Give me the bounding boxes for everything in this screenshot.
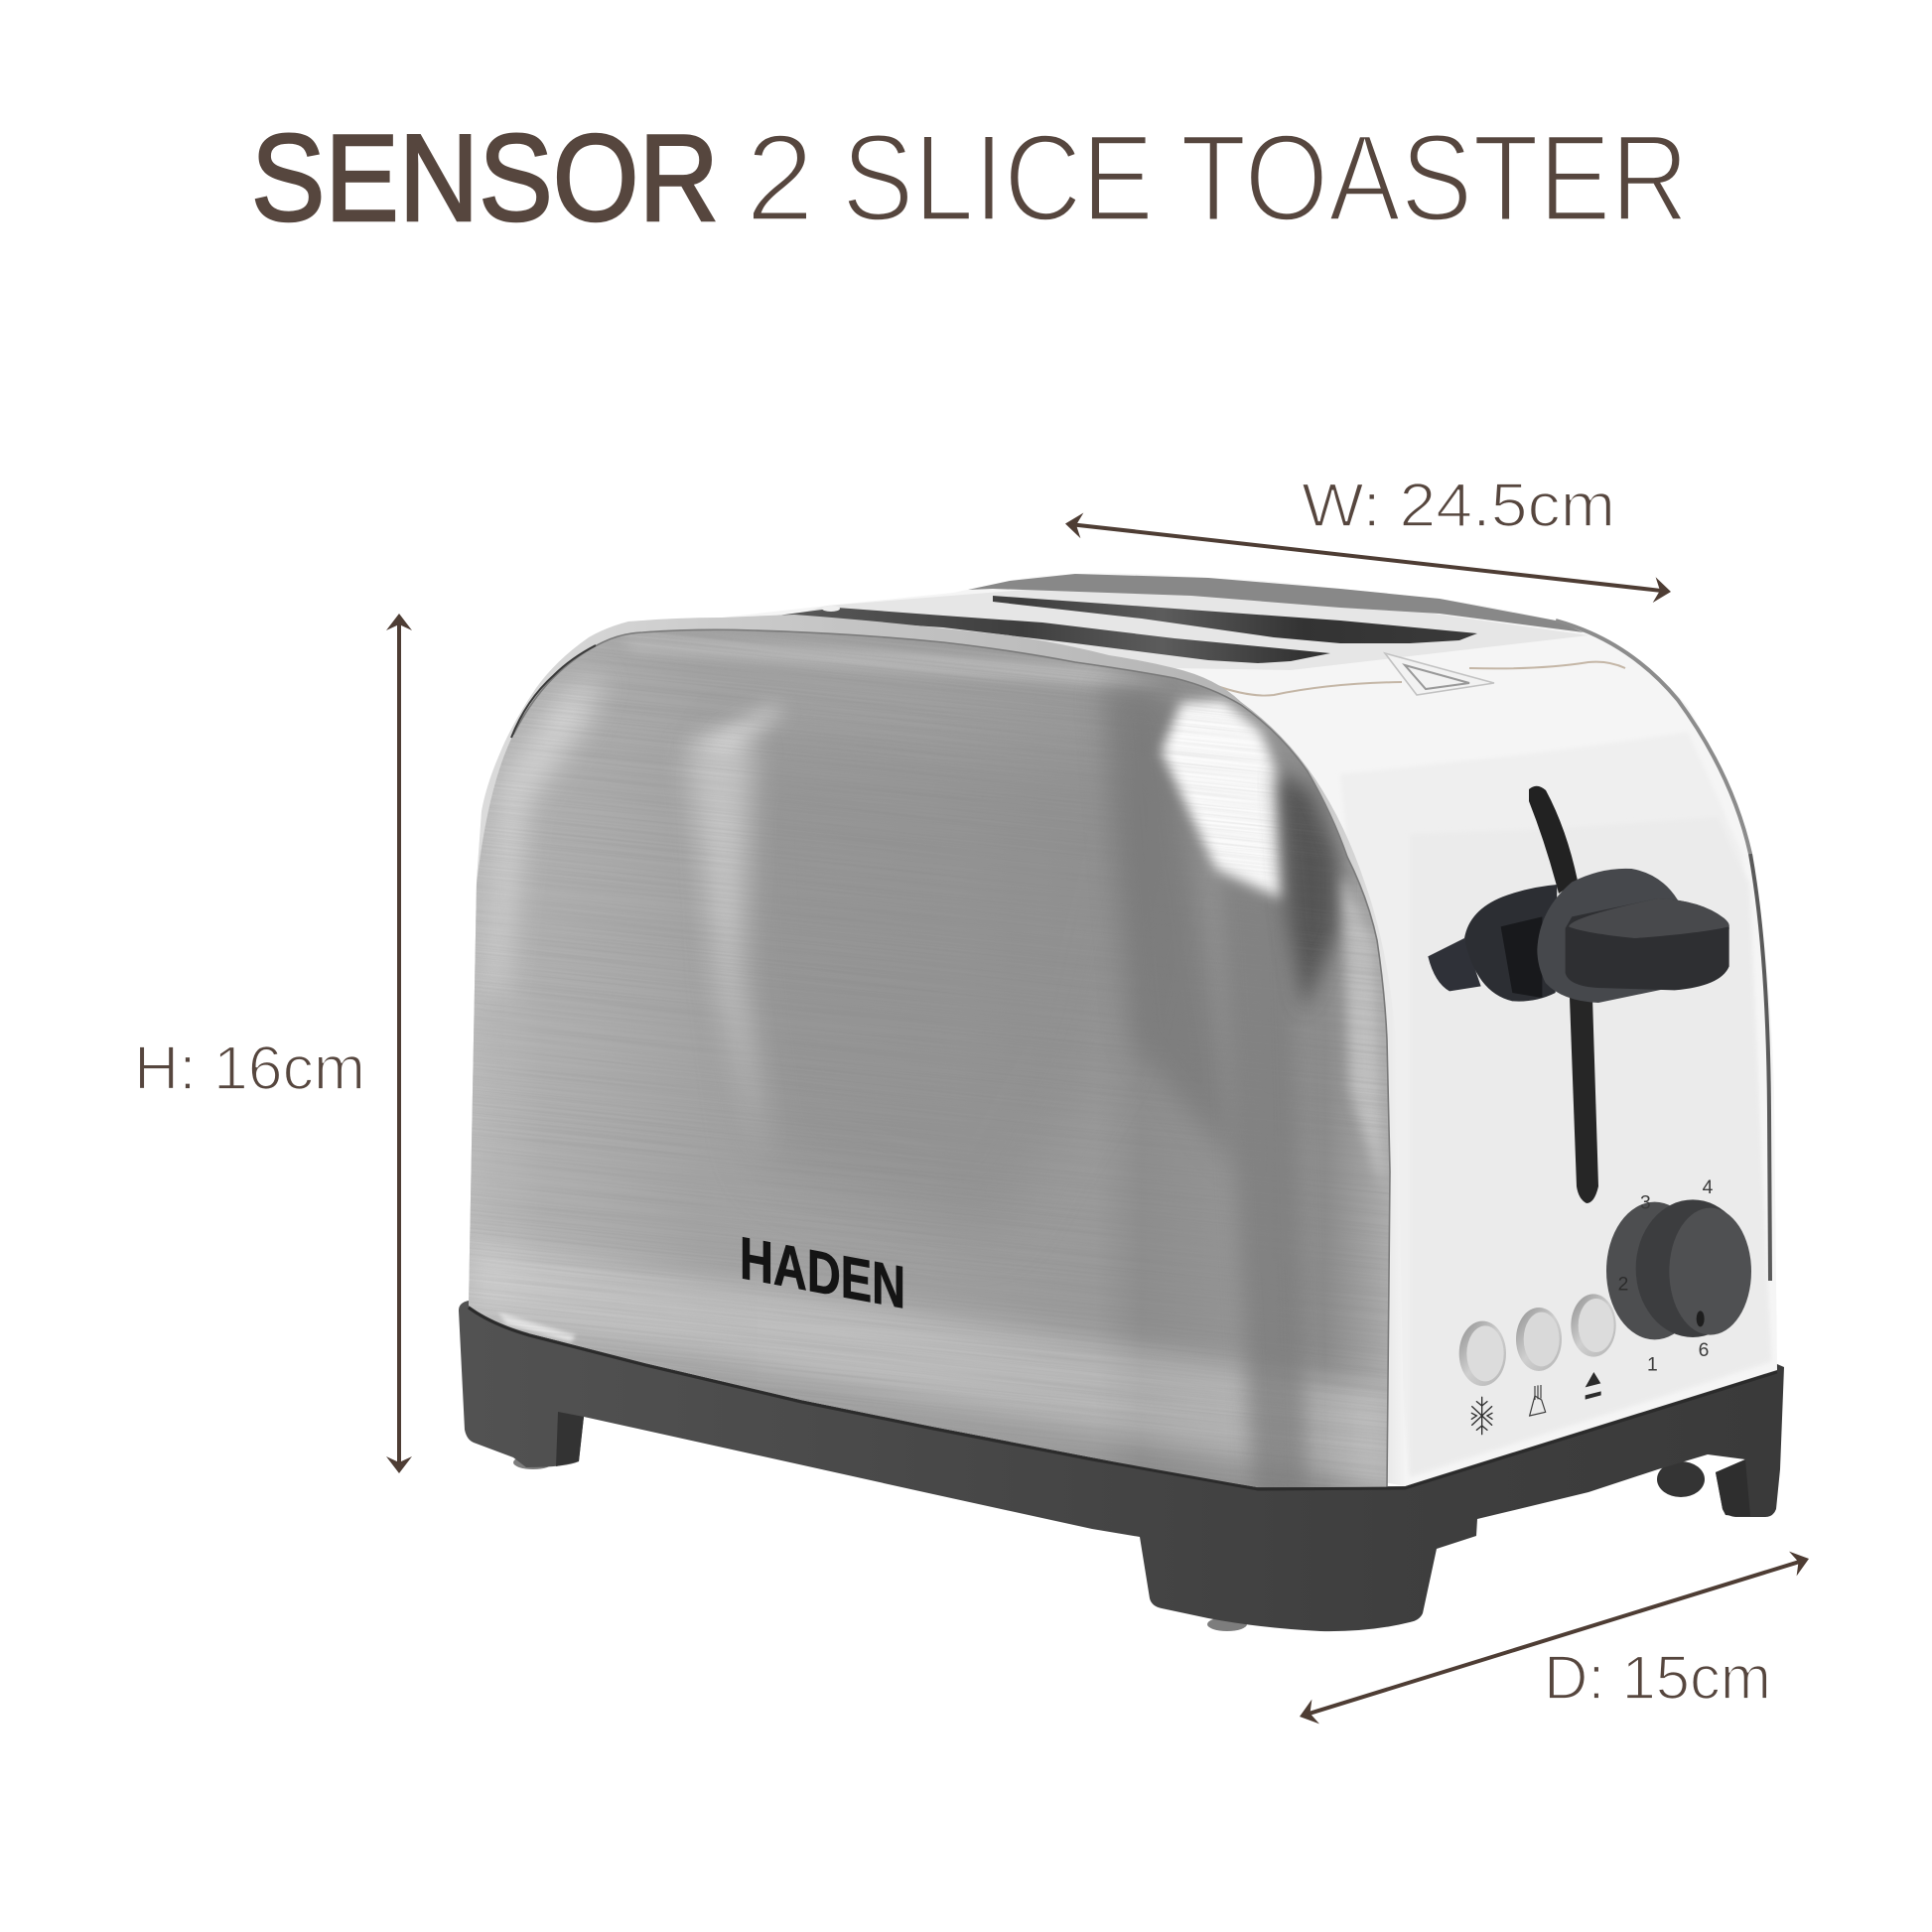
dimension: width: [1065, 472, 1671, 603]
dial numbers: 1: [1647, 1355, 1658, 1376]
controls: [1459, 1177, 1751, 1435]
browning dial band: [1636, 1199, 1749, 1337]
icon: snowflake: [1471, 1397, 1492, 1435]
title: [251, 110, 1689, 247]
title: product words: SLICE: [842, 110, 1154, 247]
body rim dark line: [513, 629, 1390, 1487]
dimension: height: [134, 614, 412, 1473]
warning triangle sticker: [1385, 653, 1494, 695]
slot upper section: [1529, 786, 1578, 894]
dial numbers: 4: [1703, 1177, 1714, 1198]
lever handle: [1428, 869, 1729, 1003]
top plate shade: [794, 586, 1588, 670]
button: reheat: [1516, 1308, 1562, 1371]
height label: H: 16cm: [134, 1035, 365, 1103]
slot stud: [822, 606, 840, 612]
dial numbers: 3: [1640, 1192, 1651, 1213]
title: product words: 2: [746, 110, 814, 247]
left foot inner shade: [556, 1412, 584, 1466]
rear lip: [968, 574, 1584, 632]
brushed steel body: [469, 630, 1390, 1487]
icon: reheat toast: [1530, 1385, 1546, 1416]
depth label: D: 15cm: [1544, 1644, 1771, 1713]
lever knob side: [1566, 898, 1729, 990]
toaster: [459, 574, 1784, 1632]
width arrow: [1065, 512, 1671, 603]
title: product words: [746, 110, 1689, 247]
browning dial face: [1669, 1208, 1751, 1335]
lever back strap: [1428, 938, 1481, 991]
lever knob top: [1569, 898, 1729, 938]
toaster rear foot: [1657, 1461, 1705, 1497]
icon: eject: [1586, 1372, 1601, 1400]
rubber feet: [513, 1455, 1247, 1631]
height arrow: [386, 614, 412, 1473]
chrome lower reflection: [1410, 817, 1770, 1475]
depth arrow: [1300, 1552, 1809, 1724]
button: defrost: [1459, 1321, 1506, 1386]
dimension: depth: [1300, 1552, 1809, 1724]
toaster base: [459, 1301, 1784, 1631]
title: product words: TOASTER: [1180, 110, 1689, 247]
dial numbers: 6: [1699, 1340, 1709, 1361]
brand logo HADEN: HADEN: [740, 1223, 905, 1321]
toaster chrome end and top: [469, 574, 1777, 1486]
browning dial back ring: [1606, 1202, 1703, 1339]
slot lower section: [1570, 998, 1598, 1203]
rear slot: [993, 596, 1477, 643]
chrome outer edge upper: [1556, 621, 1750, 854]
lever back shadow: [1501, 916, 1542, 998]
sticker seam: [1214, 662, 1625, 696]
button: cancel: [1571, 1294, 1616, 1357]
chrome soft reflection: [1340, 732, 1772, 1477]
base seam line: [469, 1308, 1777, 1489]
lever front disc: [1537, 869, 1678, 1003]
left rim shadow: [511, 645, 596, 738]
lever back disc: [1464, 885, 1557, 1002]
width label: W: 24.5cm: [1302, 472, 1615, 540]
title: brand word SENSOR: SENSOR: [251, 110, 719, 247]
dial numbers: [1618, 1177, 1714, 1376]
front slot: [777, 608, 1330, 663]
dial numbers: 2: [1618, 1274, 1628, 1295]
dial indicator dot: [1697, 1311, 1705, 1326]
right foot inner shade: [1716, 1459, 1750, 1516]
chrome outer edge lower: [1750, 854, 1770, 1281]
body rim: [469, 615, 1405, 1486]
